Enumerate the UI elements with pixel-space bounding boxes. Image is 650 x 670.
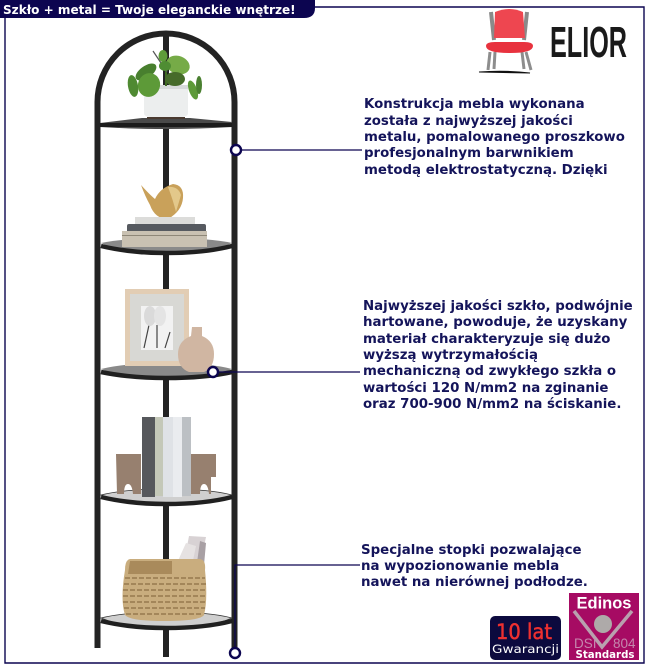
callout: glass: materiał charakteryzuje się dużo — [363, 332, 610, 347]
callout: metal: profesjonalnym barwnikiem — [364, 146, 574, 161]
callout: metal: Konstrukcja mebla wykonana — [364, 97, 585, 112]
badge: Edinos standards: Edinos — [576, 594, 632, 612]
callout: metal: została z najwyższej jakości — [364, 113, 573, 129]
callout: glass — [208, 298, 633, 412]
callout: feet: na wypozionowanie mebla — [361, 559, 559, 574]
callout: feet: nawet na nierównej podłodze. — [361, 574, 588, 590]
logo: Elior chair — [479, 9, 627, 73]
badge: Edinos standards: Standards — [576, 650, 634, 661]
shelf frame — [98, 34, 234, 657]
glass shelves — [100, 118, 232, 628]
picture frame and vase — [125, 289, 214, 372]
badge: 10 years warranty: Gwarancji — [492, 642, 559, 656]
badge: Edinos standards: DSI — [574, 636, 597, 651]
wicker basket with books — [122, 536, 206, 621]
callout: glass: oraz 700-900 N/mm2 na ściskanie. — [363, 396, 621, 412]
heading banner: Szkło + metal = Twoje eleganckie wnętrze! — [3, 3, 296, 17]
callout: glass: Najwyższej jakości szkło, podwójnie — [363, 298, 633, 314]
callout: glass: mechaniczną od zwykłego szkła o — [363, 364, 616, 379]
callout: feet: Specjalne stopki pozwalające — [361, 543, 582, 558]
plant in white pot — [126, 50, 202, 119]
badge: 10 years warranty: 10 lat — [496, 620, 552, 644]
badge: Edinos standards: 804 — [613, 636, 636, 651]
shelf unit — [98, 34, 234, 657]
callout: metal: metalu, pomalowanego proszkowo — [364, 130, 625, 145]
callout: metal: metodą elektrostatyczną. Dzięki — [364, 163, 608, 178]
callout: feet — [230, 543, 588, 658]
callout: glass: hartowane, powoduje, że uzyskany — [363, 315, 628, 330]
callout: metal — [231, 97, 625, 178]
golden bird on books — [122, 184, 207, 247]
callout: glass: wyższą wytrzymałością — [363, 347, 538, 363]
badge: Edinos standards — [569, 593, 639, 661]
badge: 10 years warranty — [490, 616, 561, 660]
books and bookends — [116, 417, 216, 497]
callout: glass: wartości 120 N/mm2 na zginanie — [363, 380, 608, 396]
